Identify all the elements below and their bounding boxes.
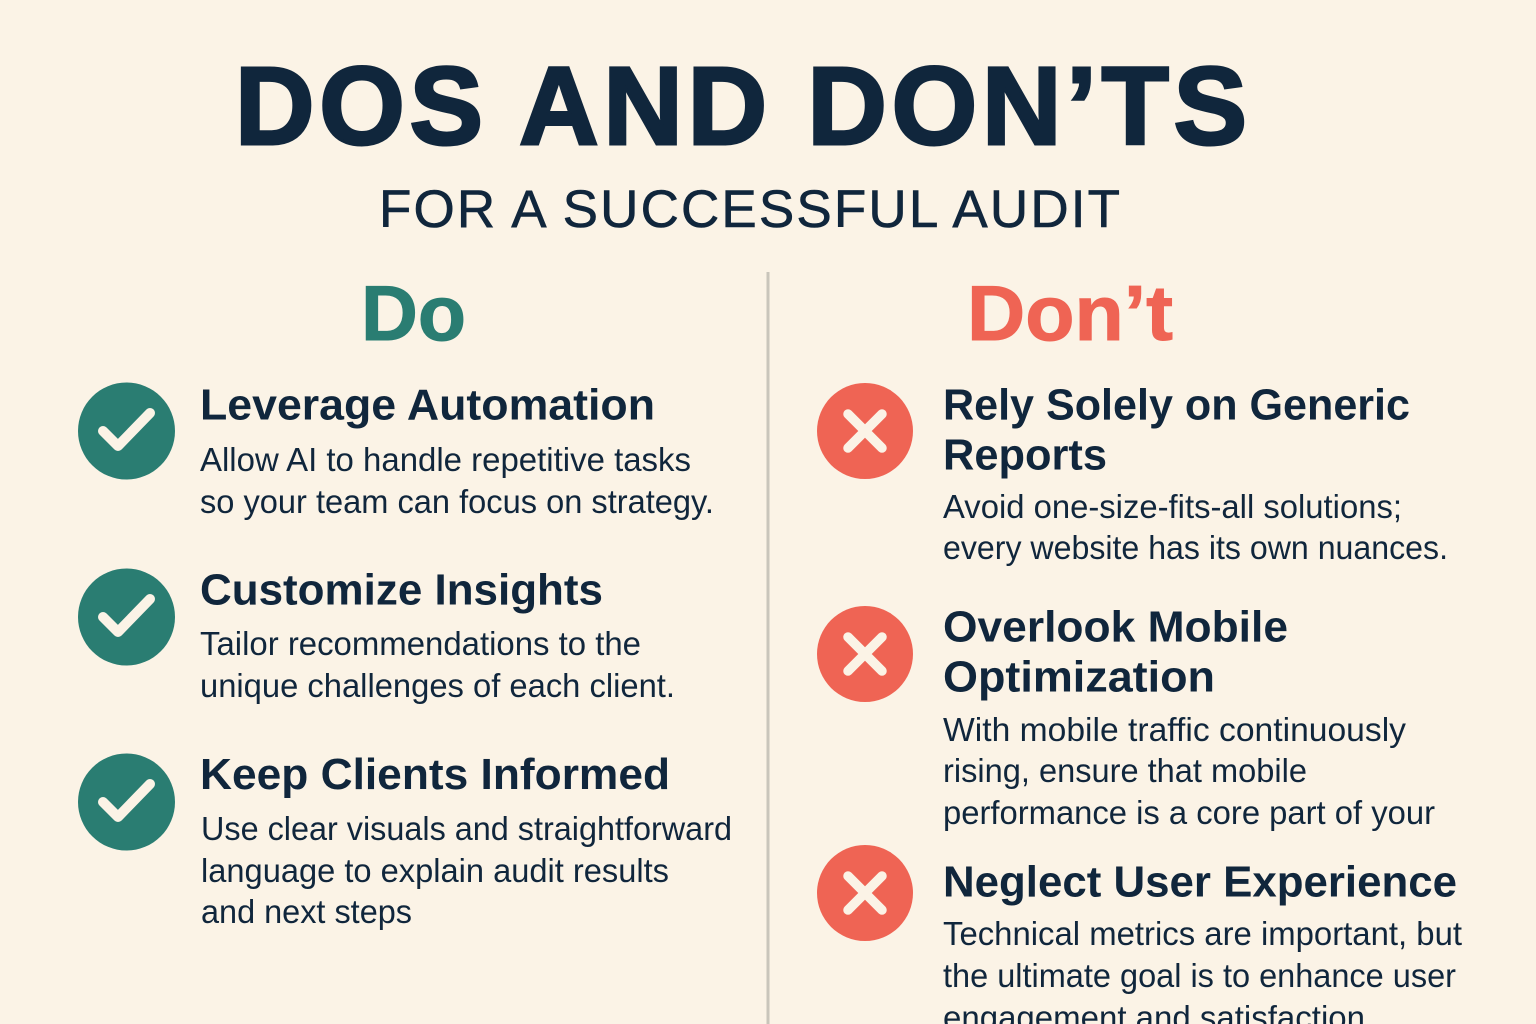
item text: With mobile traffic continuously bbox=[943, 711, 1407, 748]
item text bbox=[943, 915, 1462, 1024]
heading: Do: Do bbox=[361, 269, 466, 357]
item text bbox=[200, 625, 675, 704]
heading: Don't: Don’t bbox=[967, 269, 1173, 357]
do item: keep clients informed bbox=[78, 750, 732, 930]
item heading: Reports bbox=[943, 430, 1107, 480]
panel: don't items bbox=[817, 380, 1462, 1024]
item heading: Rely Solely on Generic bbox=[943, 380, 1410, 430]
panel: do items bbox=[78, 380, 732, 930]
item text: rising, ensure that mobile bbox=[943, 752, 1307, 789]
do item: customize insights bbox=[78, 566, 675, 704]
item text: so your team can focus on strategy. bbox=[200, 483, 714, 520]
item text: Allow AI to handle repetitive tasks bbox=[200, 441, 691, 478]
item text: the ultimate goal is to enhance user bbox=[943, 957, 1456, 994]
don't item: user experience bbox=[817, 845, 1462, 1024]
icon: check bbox=[78, 568, 175, 666]
item heading bbox=[943, 380, 1410, 480]
item heading: Keep Clients Informed bbox=[200, 750, 670, 799]
item text: unique challenges of each client. bbox=[200, 667, 675, 704]
item text: Avoid one-size-fits-all solutions; bbox=[943, 488, 1402, 525]
item text: Use clear visuals and straightforward bbox=[201, 810, 732, 847]
item heading: Overlook Mobile bbox=[943, 602, 1288, 652]
item text: Technical metrics are important, but bbox=[943, 915, 1462, 952]
don't item: generic reports bbox=[817, 380, 1448, 566]
icon: check bbox=[78, 382, 175, 480]
icon: cross bbox=[817, 845, 913, 941]
item text: performance is a core part of your bbox=[943, 794, 1435, 831]
don't item: mobile optimization bbox=[817, 602, 1435, 831]
item heading: Customize Insights bbox=[200, 566, 603, 614]
item heading: Neglect User Experience bbox=[943, 858, 1457, 906]
item text: Tailor recommendations to the bbox=[200, 625, 641, 662]
do item: leverage automation bbox=[78, 380, 714, 520]
item text bbox=[200, 441, 714, 520]
item heading: Leverage Automation bbox=[200, 380, 655, 430]
item heading bbox=[943, 602, 1288, 702]
title: DOS AND DON’TS bbox=[235, 45, 1247, 168]
item heading: Optimization bbox=[943, 652, 1215, 702]
item text: and next steps bbox=[201, 893, 412, 930]
item text: every website has its own nuances. bbox=[943, 529, 1448, 566]
item text bbox=[201, 810, 732, 930]
item text bbox=[943, 711, 1435, 831]
icon: cross bbox=[817, 606, 913, 702]
subtitle: FOR A SUCCESSFUL AUDIT bbox=[379, 180, 1120, 239]
icon: check bbox=[78, 754, 175, 850]
item text bbox=[943, 488, 1448, 566]
icon: cross bbox=[817, 383, 913, 479]
item text: language to explain audit results bbox=[201, 852, 669, 889]
